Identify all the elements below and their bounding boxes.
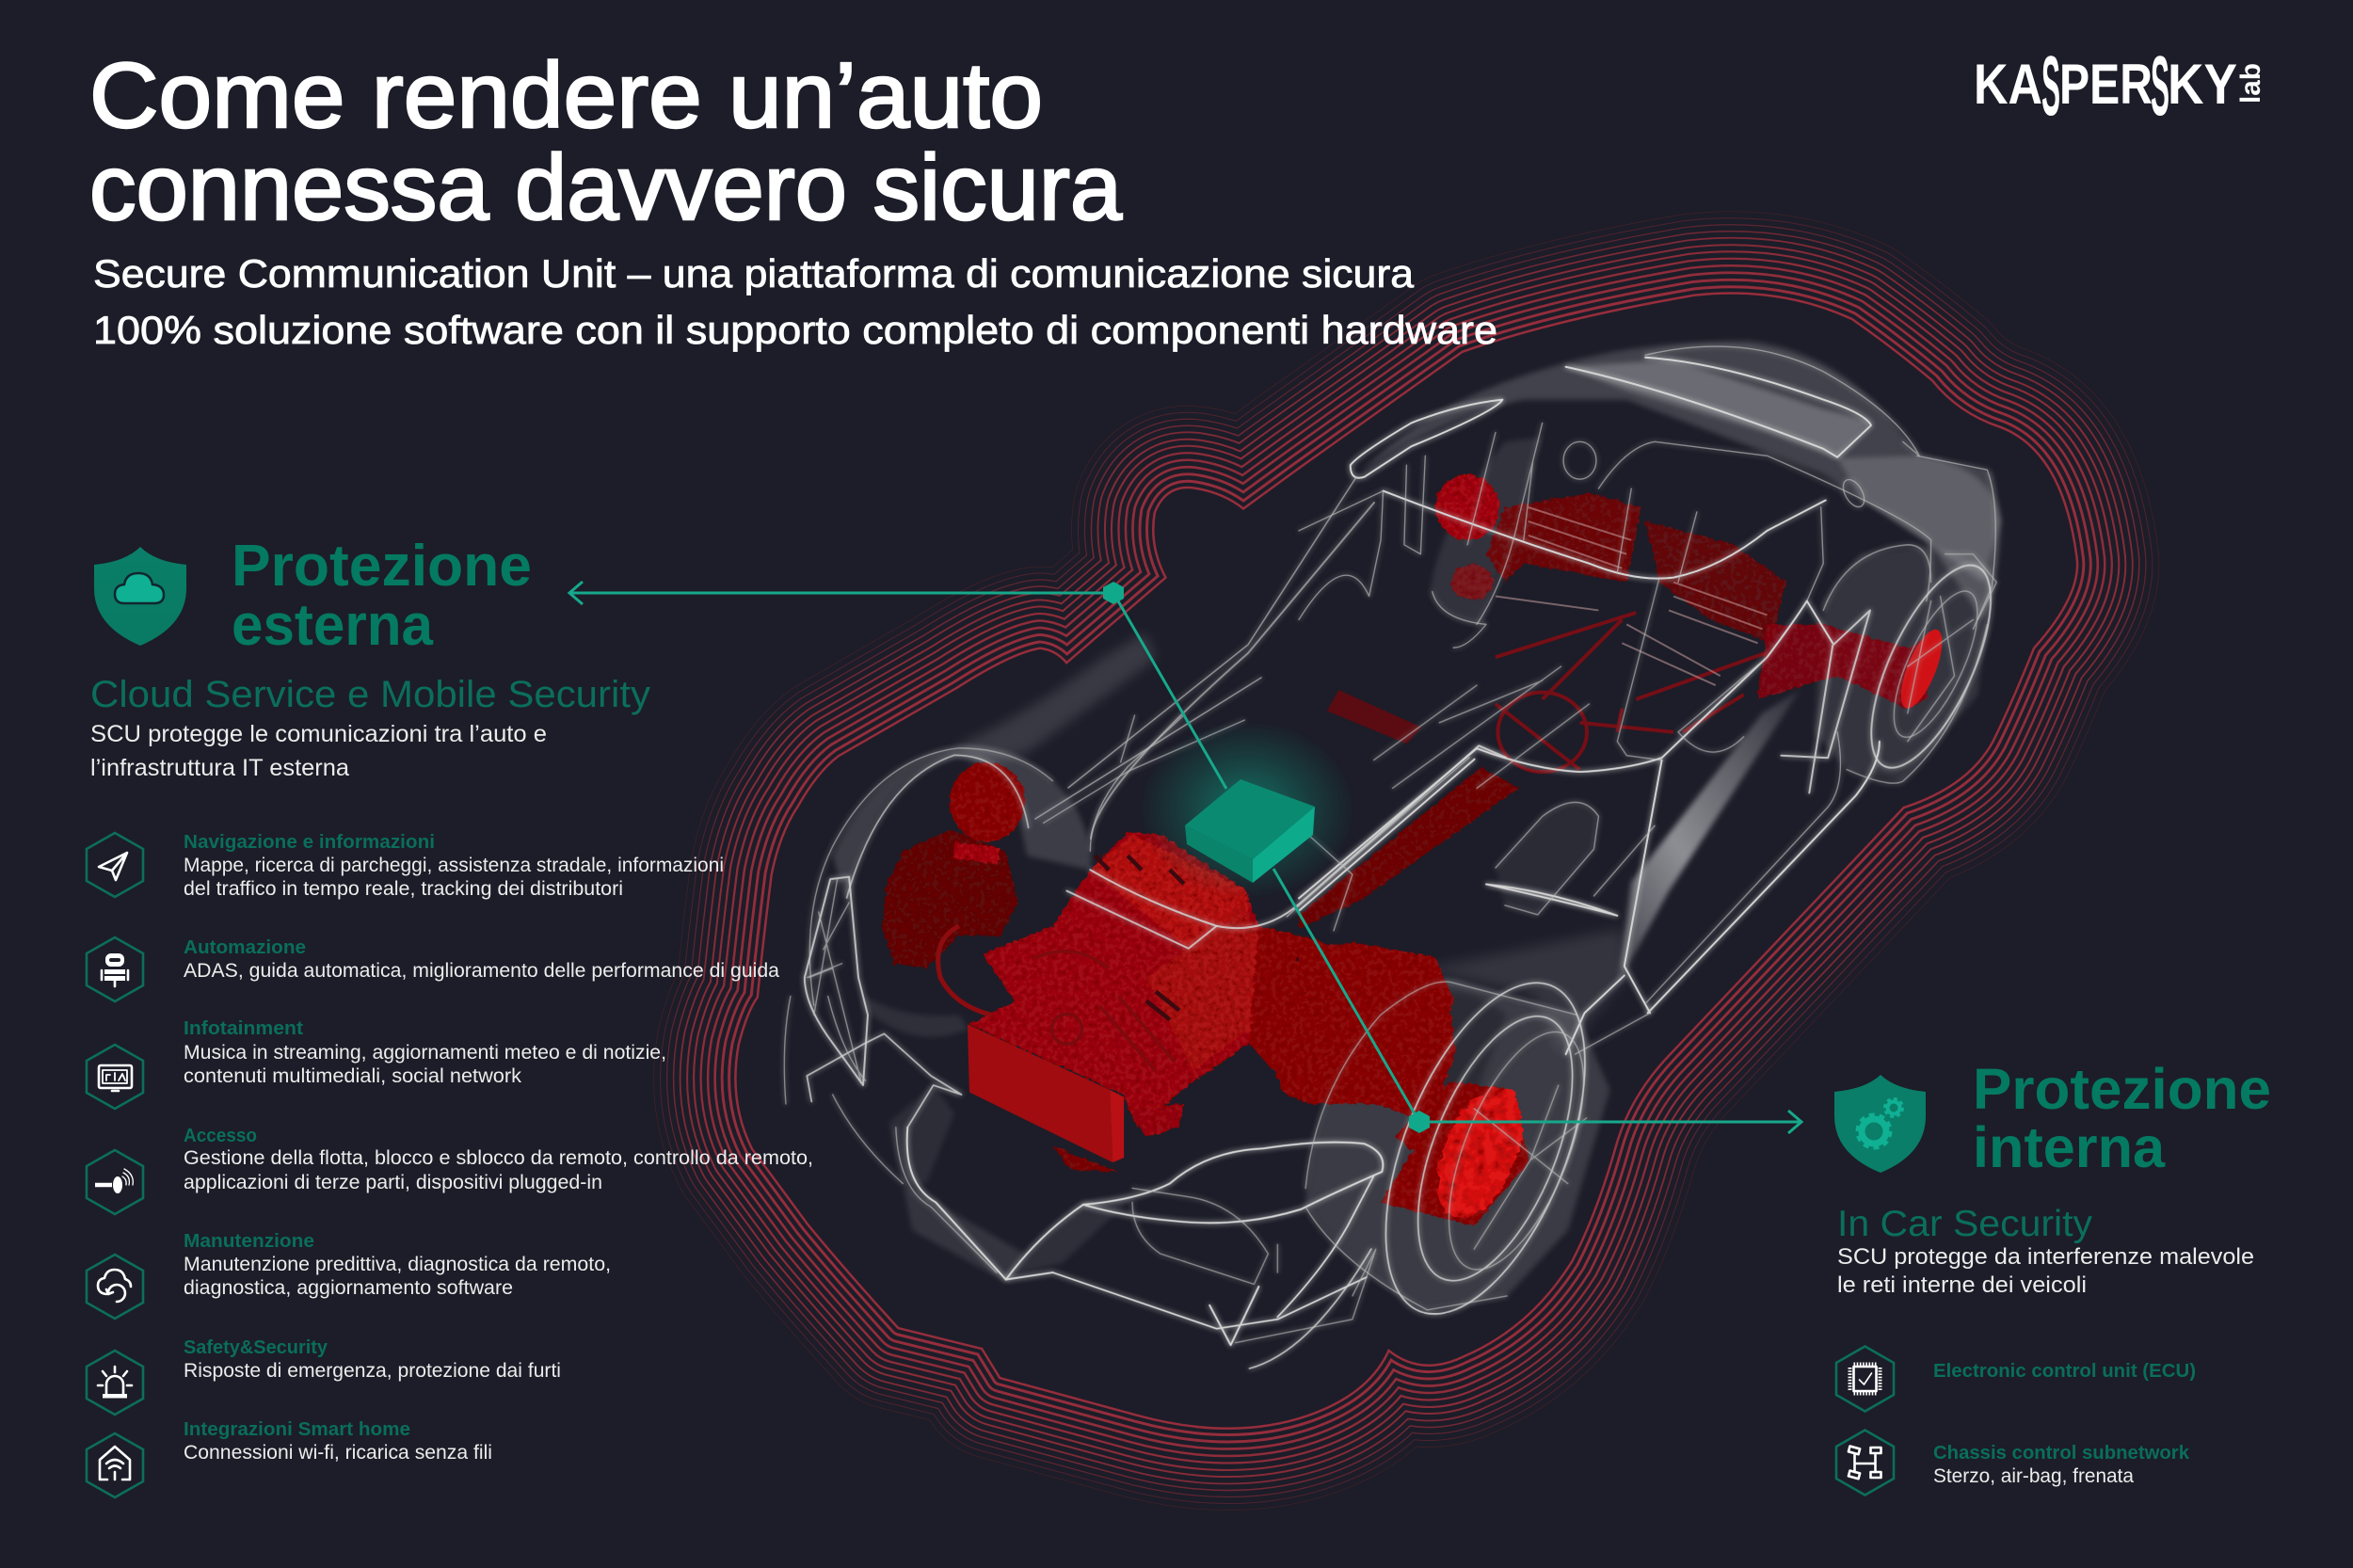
heading: protezione interna: interna <box>1973 1115 2166 1179</box>
item: navigazione: Mappe, ricerca di parcheggi, assistenza stradale, informazioni <box>184 855 724 876</box>
engine detail: hoses and slits <box>938 856 1381 1071</box>
heading: protezione interna <box>1973 1057 2271 1179</box>
item: automazione <box>87 936 779 1001</box>
heading: protezione esterna <box>232 534 532 658</box>
title <box>89 43 1123 239</box>
item: safety and security <box>87 1336 561 1415</box>
heading: protezione esterna: Protezione <box>232 534 532 599</box>
description <box>1837 1244 2254 1298</box>
item: chassis: Sterzo, air-bag, frenata <box>1933 1465 2134 1487</box>
item: navigazione: Navigazione e informazioni <box>184 831 435 853</box>
icon: gears shield <box>1834 1075 1926 1173</box>
description <box>90 721 547 781</box>
item: infotainment: Infotainment <box>184 1017 303 1039</box>
item: automazione: ADAS, guida automatica, miglioramento delle performance di guida <box>184 960 779 982</box>
item: smart home: Integrazioni Smart home <box>184 1418 410 1440</box>
car ghost body shading <box>833 341 2001 1310</box>
heading: protezione esterna: esterna <box>232 593 433 658</box>
item: automazione: Automazione <box>184 936 306 958</box>
item: navigazione <box>87 831 724 900</box>
icon: wifi house <box>87 1433 143 1497</box>
item: accesso <box>87 1125 813 1214</box>
logo: Kaspersky Lab <box>1974 40 2266 134</box>
icon: navigation arrow <box>87 833 143 897</box>
description: SCU protegge da interferenze malevole <box>1837 1244 2254 1270</box>
icon: cloud shield <box>94 547 186 646</box>
windscreen pillars <box>1035 477 1374 839</box>
subtitle: Secure Communication Unit – una piattaforma di comunicazione sicura <box>93 251 1415 296</box>
radiator <box>968 1024 1124 1162</box>
item: accesso: Gestione della flotta, blocco e sblocco da remoto, controllo da remoto, <box>184 1147 813 1169</box>
front engine block <box>882 762 1530 1225</box>
item: manutenzione <box>87 1230 611 1319</box>
icon: robot <box>87 937 143 1001</box>
description: l’infrastruttura IT esterna <box>90 755 349 781</box>
connector arrow: external protection <box>569 582 1226 789</box>
item: ECU <box>1836 1346 2196 1412</box>
item: accesso: applicazioni di terze parti, dispositivi plugged-in <box>184 1172 602 1193</box>
logo: Kaspersky Lab: KA <box>1974 53 2042 116</box>
icon: siren <box>87 1351 143 1415</box>
rear frame and seats in red <box>1299 474 1950 1054</box>
car white wireframe lines <box>784 346 2015 1368</box>
item: safety and security: Risposte di emergenza, protezione dai furti <box>184 1360 561 1382</box>
logo: Kaspersky Lab: S <box>2041 40 2060 134</box>
item: smart home: Connessioni wi-fi, ricarica senza fili <box>184 1442 492 1464</box>
item: chassis <box>1836 1431 2190 1495</box>
item: manutenzione: Manutenzione <box>184 1230 314 1252</box>
description: SCU protegge le comunicazioni tra l’auto e <box>90 721 547 747</box>
item: infotainment: Musica in streaming, aggiornamenti meteo e di notizie, <box>184 1042 666 1064</box>
item: manutenzione: diagnostica, aggiornamento software <box>184 1277 513 1299</box>
item: navigazione: del traffico in tempo reale, tracking dei distributori <box>184 878 623 900</box>
rear half lines <box>1299 346 2015 1054</box>
heading: protezione interna: Protezione <box>1973 1057 2271 1121</box>
item: manutenzione: Manutenzione predittiva, diagnostica da remoto, <box>184 1254 611 1275</box>
item: infotainment <box>87 1017 666 1109</box>
red contour shield around car <box>737 295 2076 1427</box>
logo: Kaspersky Lab: lab <box>2235 63 2266 104</box>
icon: media screen <box>87 1045 143 1109</box>
seat slats <box>1496 507 1768 685</box>
icon: chassis <box>1836 1431 1894 1495</box>
title: Come rendere un’auto <box>89 43 1043 147</box>
icon: cloud refresh <box>87 1255 143 1319</box>
item: ECU: Electronic control unit (ECU) <box>1933 1360 2196 1382</box>
logo: Kaspersky Lab: S <box>2151 40 2169 134</box>
secure communication unit cube <box>1139 720 1355 899</box>
front brake disc <box>1420 1075 1539 1231</box>
item: accesso: Accesso <box>184 1125 257 1146</box>
subheading: In Car Security <box>1837 1204 2093 1244</box>
red engine and mechanical parts <box>882 474 1950 1231</box>
item: chassis: Chassis control subnetwork <box>1933 1442 2190 1464</box>
subtitle: 100% soluzione software con il supporto completo di componenti hardware <box>93 308 1497 352</box>
front fender tube <box>957 632 1156 767</box>
icon: wireless key <box>87 1150 143 1214</box>
subheading: Cloud Service e Mobile Security <box>90 674 650 715</box>
front half lines <box>784 715 1625 1368</box>
item: smart home <box>87 1418 492 1497</box>
item: safety and security: Safety&Security <box>184 1336 328 1358</box>
description: le reti interne dei veicoli <box>1837 1272 2087 1298</box>
logo: Kaspersky Lab: KY <box>2168 53 2237 116</box>
item: infotainment: contenuti multimediali, social network <box>184 1065 522 1087</box>
icon: chip <box>1836 1346 1894 1412</box>
panel: protezione esterna <box>87 534 813 1497</box>
subtitle <box>93 251 1497 352</box>
logo: Kaspersky Lab: PER <box>2059 53 2153 116</box>
connector arrow: internal protection <box>1273 869 1801 1133</box>
panel: protezione interna <box>1834 1057 2271 1495</box>
title: connessa davvero sicura <box>89 136 1123 239</box>
